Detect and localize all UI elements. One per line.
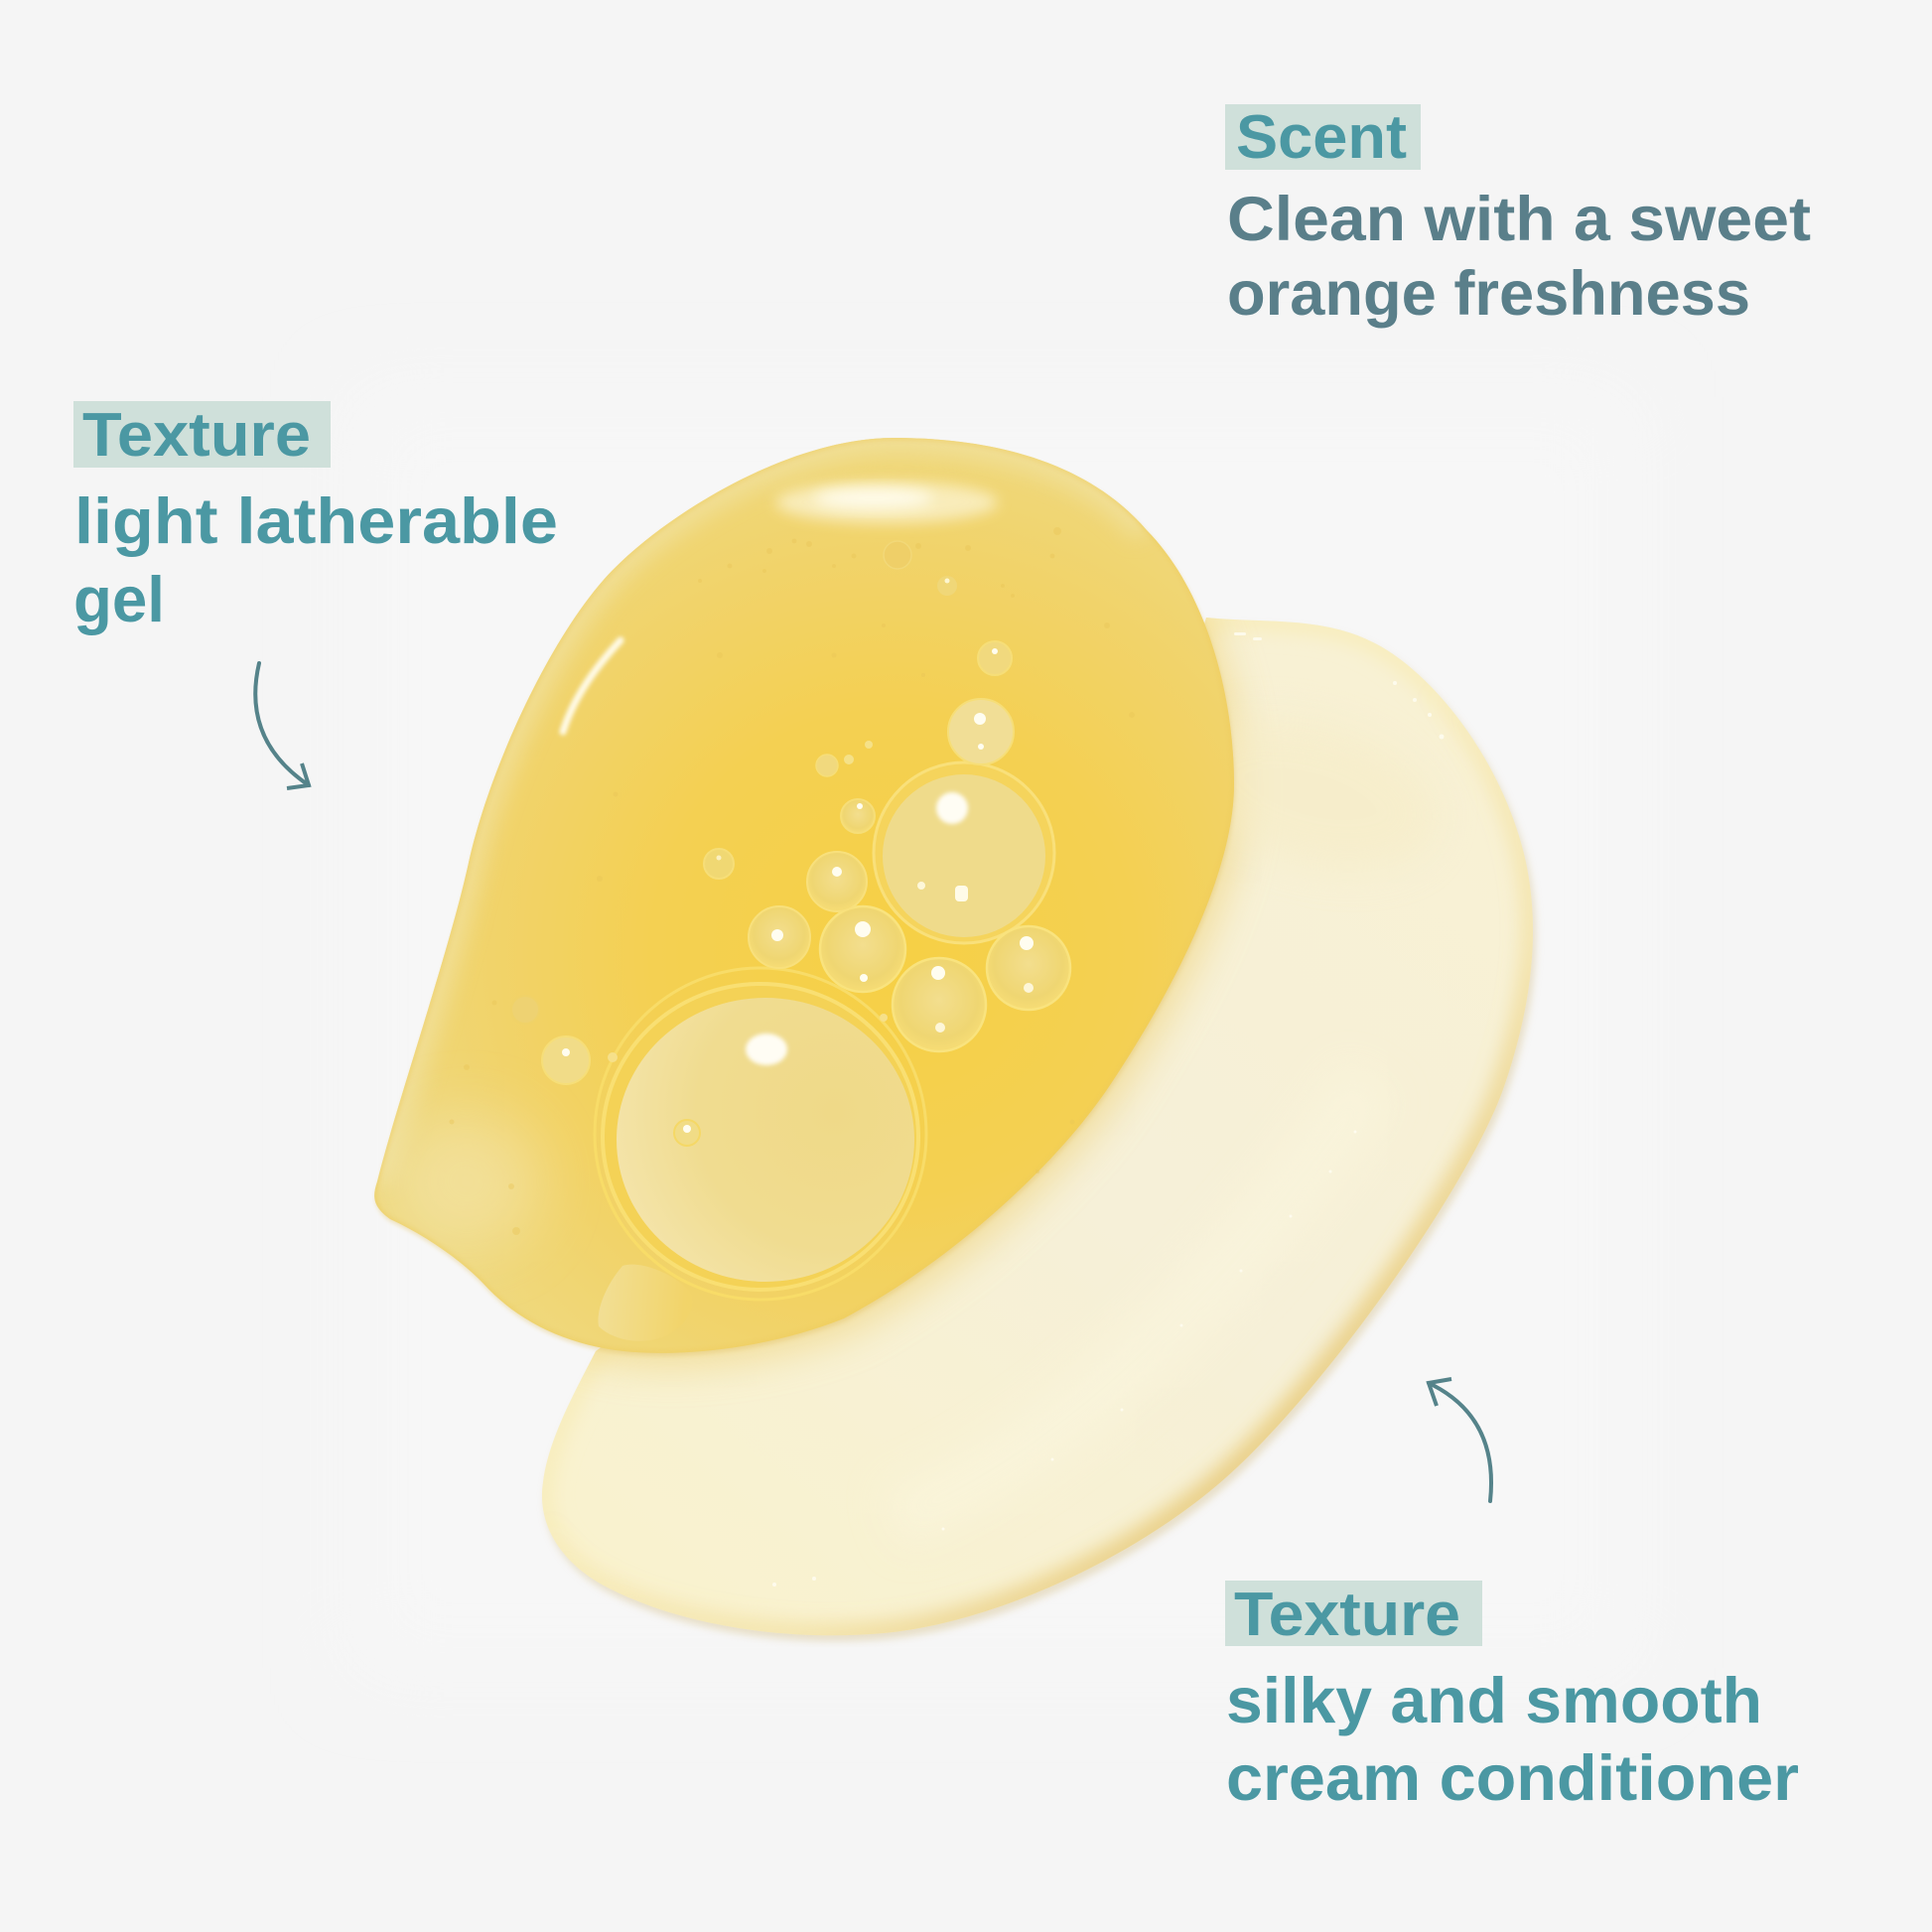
arrow: to gel xyxy=(255,663,309,788)
large bubble xyxy=(595,968,926,1300)
infographic canvas xyxy=(73,104,1811,1801)
small bubbles xyxy=(511,541,1070,1084)
cream texture description xyxy=(1226,1664,1799,1814)
gel shadow xyxy=(375,441,1235,1356)
medium bubble xyxy=(874,762,1054,943)
gel texture description: gel xyxy=(73,563,165,635)
scent description: orange freshness xyxy=(1227,259,1750,329)
panel: gel swatch xyxy=(374,438,1235,1356)
cream speckles xyxy=(772,632,1444,1587)
cream texture description: cream conditioner xyxy=(1226,1741,1799,1814)
scent description: Clean with a sweet xyxy=(1227,185,1811,254)
cream body xyxy=(542,618,1533,1635)
panel: conditioner cream swatch xyxy=(542,618,1539,1645)
scent description xyxy=(1227,185,1811,329)
scent tag: Scent xyxy=(1236,103,1407,172)
label block: gel texture xyxy=(73,401,558,635)
gel texture tag: Texture xyxy=(82,401,311,470)
gel rim and highlights xyxy=(374,438,1234,1353)
label block: cream texture xyxy=(1225,1581,1799,1814)
cream texture description: silky and smooth xyxy=(1226,1664,1762,1736)
cream texture tag: Texture xyxy=(1234,1581,1460,1649)
cream shadow xyxy=(545,623,1536,1641)
gel body xyxy=(374,438,1234,1353)
label block: scent xyxy=(1225,103,1811,329)
gel texture description xyxy=(73,484,558,635)
cream rim shading xyxy=(542,618,1533,1636)
gel speckles xyxy=(449,527,1135,1235)
arrow: to cream xyxy=(1429,1379,1491,1501)
gel texture description: light latherable xyxy=(74,484,558,557)
